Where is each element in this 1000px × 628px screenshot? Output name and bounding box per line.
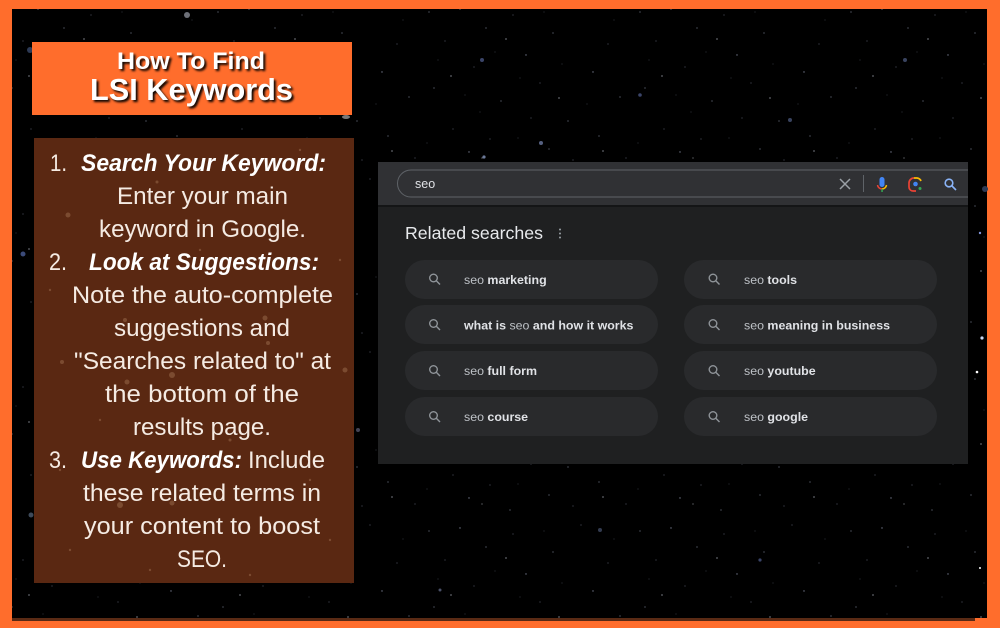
pill: what is seo and how it works [405,305,658,344]
step 3 [49,447,325,573]
step 3: SEO. [177,546,227,573]
pill: seo course: seo course [464,410,528,424]
step 1: Search Your Keyword: [81,150,326,177]
pill: seo meaning in business: seo meaning in business [744,318,890,332]
title line 2: LSI Keywords [90,72,293,107]
icon: microphone [878,177,886,192]
panel: google related searches screenshot [378,162,968,464]
step 2: 2. [49,249,67,276]
step 2: the bottom of the [105,381,299,408]
pill: seo meaning in business [684,305,937,344]
step 2: results page. [133,414,271,441]
pill: seo full form [405,351,658,390]
step 3: Use Keywords: [81,447,242,474]
icon: google lens [909,178,922,191]
pill: seo google [684,397,937,436]
step 3: 3. [49,447,67,474]
pill: seo google: seo google [744,410,808,424]
step 2: Look at Suggestions: [89,249,319,276]
pill: seo youtube [684,351,937,390]
title banner [32,42,352,115]
pill: seo tools [684,260,937,299]
step 3: your content to boost [84,513,320,540]
pill: seo tools: seo tools [744,273,797,287]
panel: steps [34,138,354,583]
step 2: "Searches related to" at [74,348,331,375]
step 1: keyword in Google. [99,216,306,243]
step 2: Note the auto-complete [72,282,333,309]
pill: seo marketing: seo marketing [464,273,547,287]
step 1 [50,150,326,243]
icon: more menu [559,228,561,238]
step 3: Include [248,447,325,474]
pill: seo youtube: seo youtube [744,364,816,378]
search header [378,162,968,207]
pill: seo full form: seo full form [464,364,537,378]
heading: related searches: Related searches [405,223,543,243]
pill: seo marketing [405,260,658,299]
step 2 [49,249,333,441]
icon: clear [840,179,850,189]
step 1: Enter your main [117,183,288,210]
step 1: 1. [50,150,67,177]
pill: seo course [405,397,658,436]
search query: seo [415,177,435,191]
title line 1: How To Find [117,48,265,75]
icon: search [945,179,956,190]
step 3: these related terms in [83,480,321,507]
pill: what is seo and how it works: what is seo and how it works [463,318,633,332]
step 2: suggestions and [114,315,290,342]
